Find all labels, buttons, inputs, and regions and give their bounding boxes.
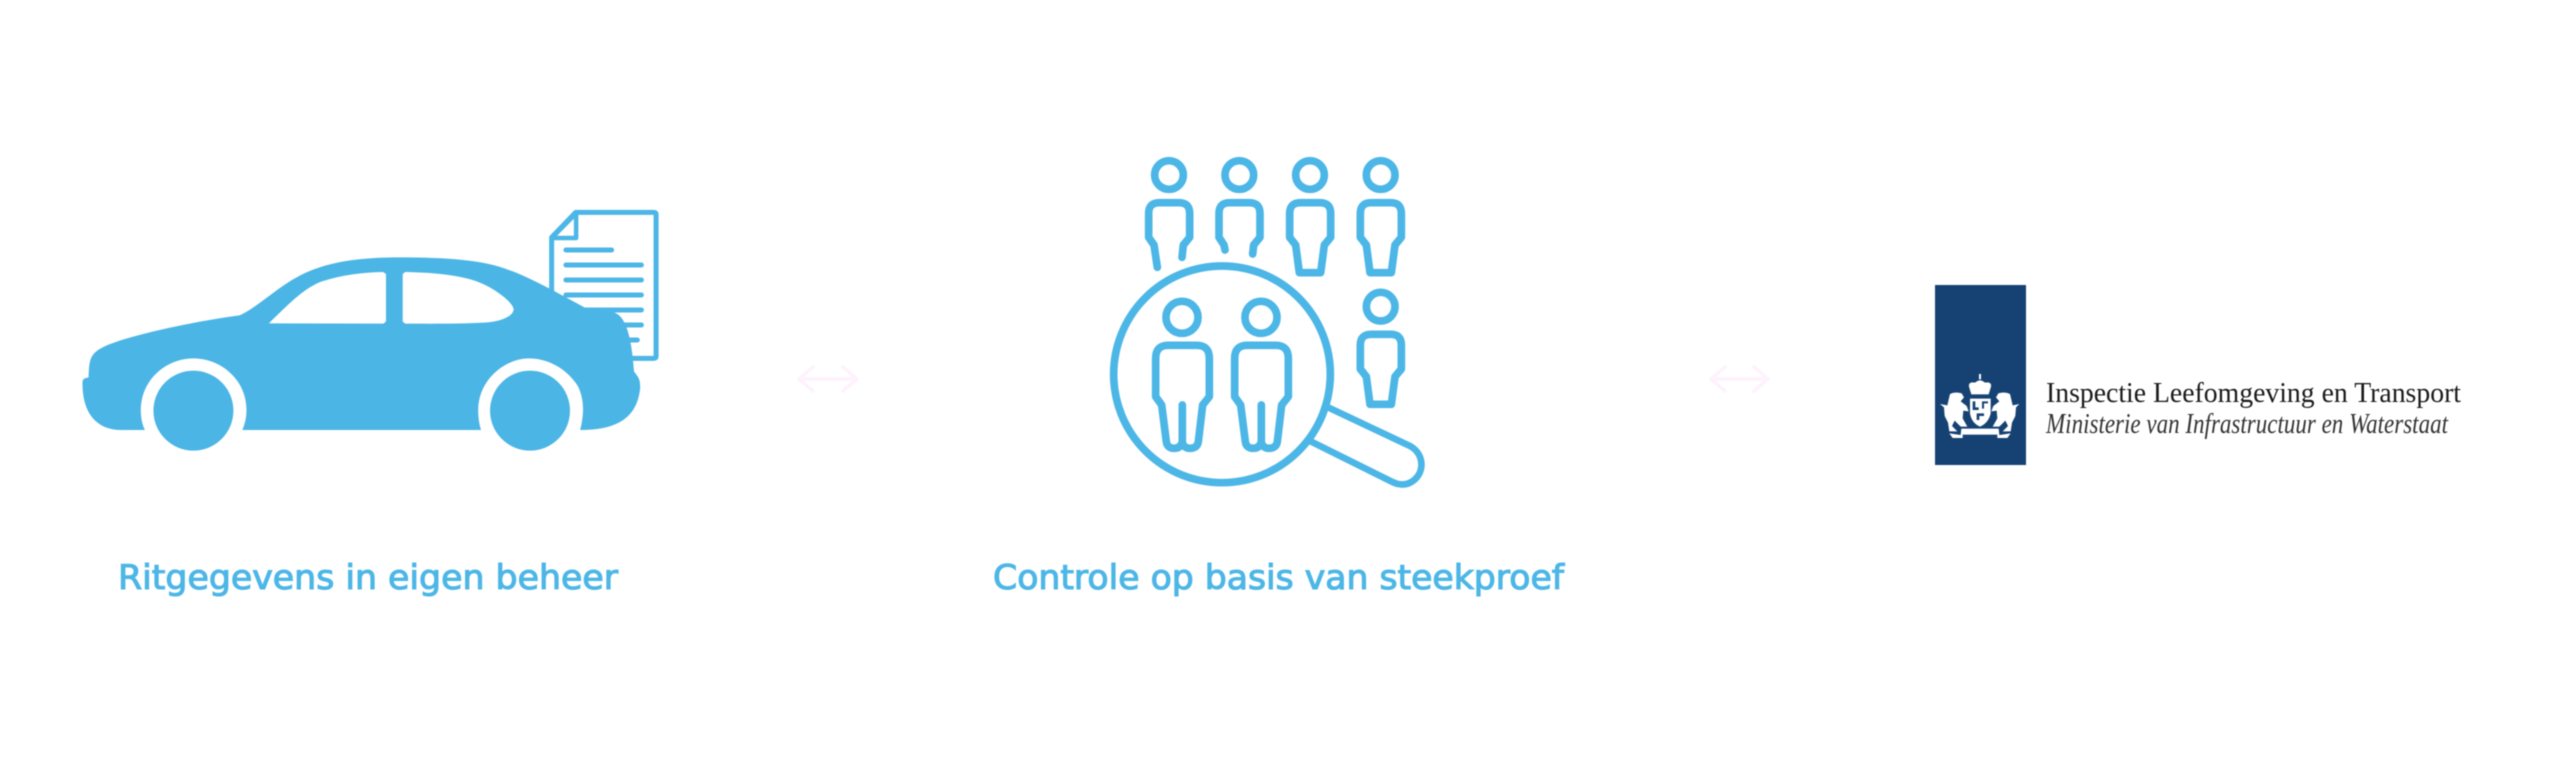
motto ribbon xyxy=(1949,429,2011,438)
large person right xyxy=(1235,301,1288,448)
person 4 xyxy=(1360,161,1401,273)
magnifier lens xyxy=(1114,266,1330,483)
car windows xyxy=(269,272,514,324)
large person left xyxy=(1156,301,1209,448)
icon: car body xyxy=(82,257,640,430)
logo text line 1: Inspectie Leefomgeving en Transport xyxy=(2046,377,2461,409)
shield xyxy=(1970,399,1991,427)
icon: magnifier over people xyxy=(1114,161,1421,485)
magnifier handle xyxy=(1310,408,1421,485)
right lion xyxy=(1991,392,2019,431)
logo blue ribbon xyxy=(1935,285,2026,465)
logo crest xyxy=(1940,374,2019,438)
person 3 xyxy=(1290,161,1331,273)
person 1 xyxy=(1149,161,1190,267)
person 2 xyxy=(1219,161,1260,254)
arrow: left double arrow xyxy=(799,367,857,391)
heading: controle: Controle op basis van steekproef xyxy=(993,558,1565,598)
icon: document behind car xyxy=(552,212,656,358)
car wheels xyxy=(153,371,570,451)
left lion xyxy=(1940,392,1969,431)
logo text line 2: Ministerie van Infrastructuur en Waterstaat xyxy=(2045,408,2449,440)
crown xyxy=(1969,374,1991,394)
person 5 xyxy=(1360,292,1401,404)
heading: ritgegevens: Ritgegevens in eigen beheer xyxy=(118,558,618,598)
icon: car with document xyxy=(82,212,656,451)
logo: Inspectie Leefomgeving en Transport xyxy=(1935,285,2461,465)
arrow: right double arrow xyxy=(1711,367,1768,391)
